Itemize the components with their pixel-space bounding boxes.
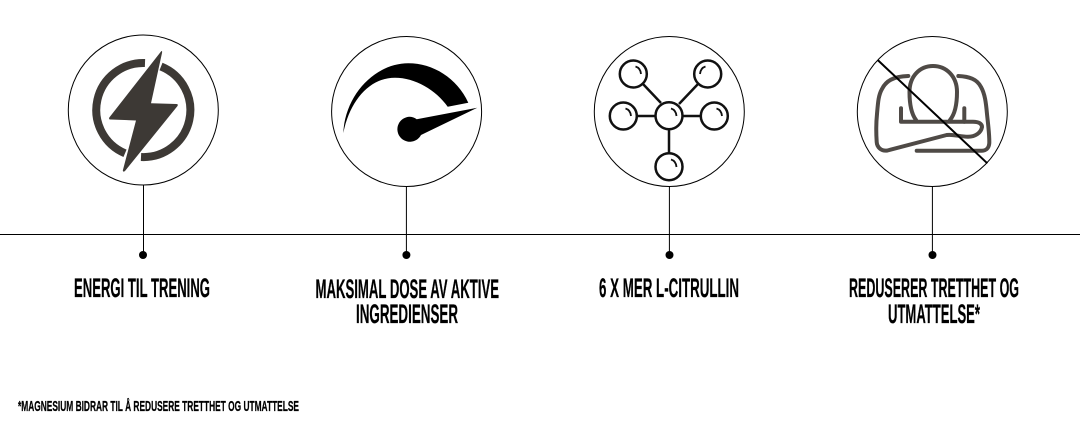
icon: molecule — [594, 36, 744, 186]
connector with dot — [139, 185, 147, 259]
label: maximum dose — [316, 274, 499, 329]
panel: maximum dose — [316, 36, 499, 329]
footnote: *MAGNESIUM BIDRAR TIL Å REDUSERE TRETTHET OG UTMATTELSE — [18, 398, 299, 415]
icon: lightning bolt in ring — [68, 35, 218, 185]
label: reduces fatigue — [849, 273, 1019, 329]
infographic: four product benefits on a timeline: MAKSIMAL DOSE AV AKTIVE — [316, 274, 499, 304]
label: maximum dose: INGREDIENSER — [356, 299, 458, 329]
connector with dot — [402, 187, 410, 259]
panel: energy for training — [68, 35, 218, 303]
connector with dot — [928, 187, 936, 259]
panel: L-citrulline — [594, 36, 744, 303]
panel: energy for training: ENERGI TIL TRENING — [74, 273, 210, 303]
panel: reduces fatigue — [849, 36, 1019, 329]
label: citrulline: 6 X MER L-CITRULLIN — [599, 273, 739, 303]
label: reduces fatigue: UTMATTELSE* — [888, 299, 980, 329]
icon: crossed-out tired person — [857, 36, 1007, 186]
icon: speedometer gauge — [332, 36, 482, 186]
connector with dot — [666, 187, 674, 259]
